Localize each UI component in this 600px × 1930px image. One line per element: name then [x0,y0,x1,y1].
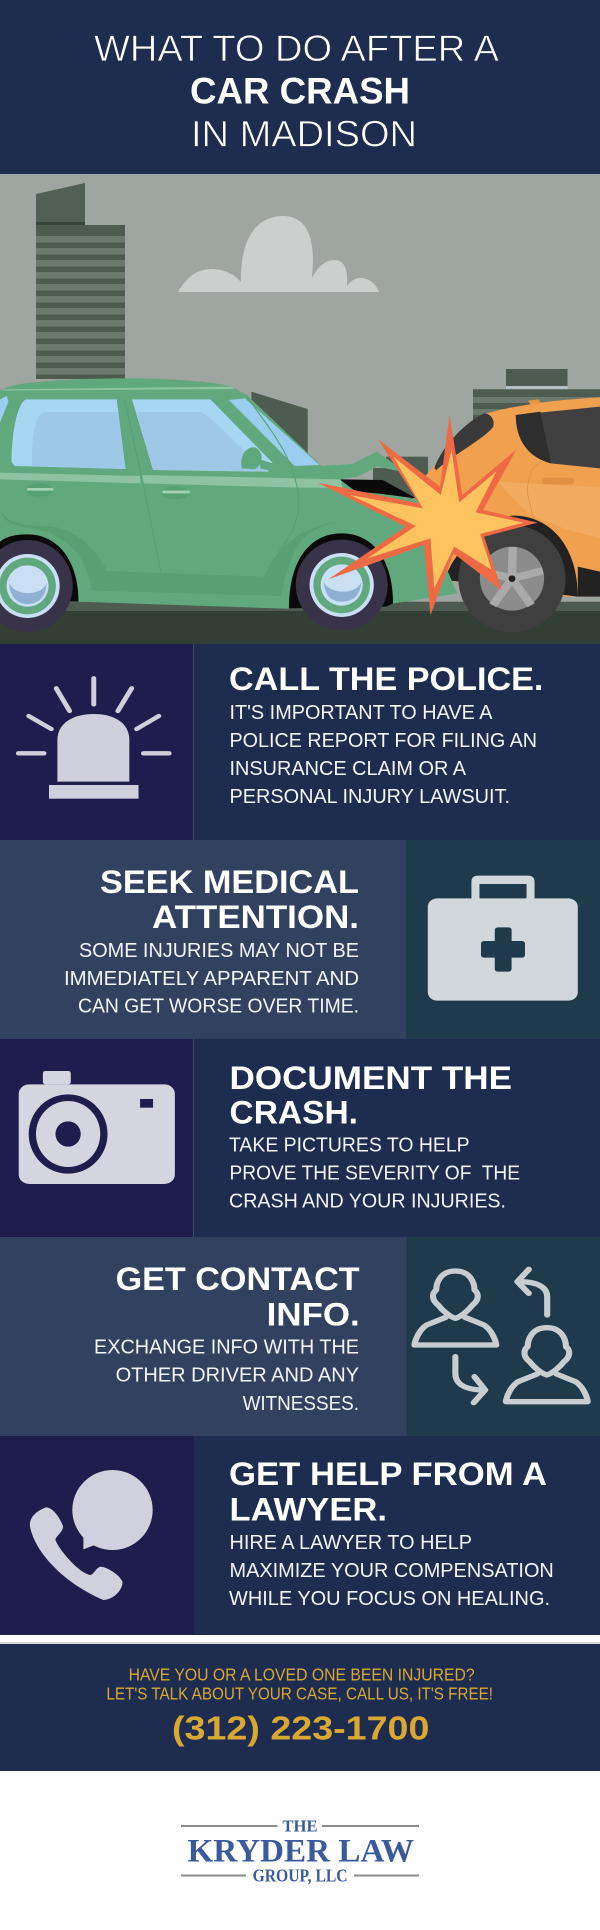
title [94,27,499,155]
logo: KRYDER LAW [188,1834,414,1870]
car windows [0,396,320,472]
callout text: LET'S TALK ABOUT YOUR CASE, CALL US, IT'S FREE! [106,1683,493,1703]
panel: get contact info [0,1237,600,1436]
road [0,602,600,644]
orange car [425,397,600,632]
text: document the crash: CRASH AND YOUR INJURIES. [229,1191,506,1213]
text: get contact info [94,1336,359,1415]
text: get contact info: WITNESSES. [243,1393,359,1415]
text: get help from a lawyer [229,1532,554,1610]
callout text: HAVE YOU OR A LOVED ONE BEEN INJURED? [129,1665,475,1685]
logo: THE [282,1817,318,1836]
text: document the crash: TAKE PICTURES TO HELP [229,1135,470,1157]
heading: seek medical attention: ATTENTION. [152,899,359,935]
text: seek medical attention: SOME INJURIES MAY NOT BE [79,940,359,962]
building: left tower [36,183,125,379]
heading: seek medical attention [100,864,359,935]
text: seek medical attention: CAN GET WORSE OVER TIME. [78,996,359,1018]
text: call the police: PERSONAL INJURY LAWSUIT. [230,786,510,808]
heading: call the police: CALL THE POLICE. [229,661,543,697]
text: get help from a lawyer: WHILE YOU FOCUS ON HEALING. [229,1588,550,1610]
panel: seek medical attention [0,840,600,1039]
buildings behind cars [251,369,600,508]
text: get contact info: OTHER DRIVER AND ANY [116,1365,359,1387]
panel: call the police [0,644,600,840]
panel: call to action [0,1644,600,1771]
title: IN MADISON [191,113,417,155]
text: seek medical attention: IMMEDIATELY APPARENT AND [64,968,359,990]
crash star [318,415,538,615]
crash illustration [0,174,600,644]
text: document the crash: PROVE THE SEVERITY OF THE [230,1163,520,1185]
callout text [106,1665,493,1703]
title: WHAT TO DO AFTER A [94,27,499,69]
panel: document the crash [0,1039,600,1237]
icon: phone and speech bubble [30,1470,153,1600]
rear wheel [0,540,73,632]
heading: document the crash [230,1060,512,1130]
phone number: (312) 223-1700 [172,1710,429,1747]
heading: get contact info [116,1261,360,1332]
header panel [0,0,600,174]
heading: document the crash: CRASH. [230,1094,358,1130]
heading: get help from a lawyer: GET HELP FROM A [229,1456,547,1492]
icon: exchange contacts [414,1269,588,1403]
front wheel [296,540,388,630]
text: get help from a lawyer: HIRE A LAWYER TO HELP [230,1532,472,1554]
heading: get contact info: INFO. [267,1296,360,1332]
text: seek medical attention [64,940,359,1018]
text: call the police: POLICE REPORT FOR FILING AN [230,730,537,752]
heading: get help from a lawyer: LAWYER. [230,1492,387,1528]
text: call the police: INSURANCE CLAIM OR A [230,758,466,780]
logo: GROUP, LLC [253,1866,348,1886]
green car [0,378,457,632]
logo [181,1817,419,1886]
heading: seek medical attention: SEEK MEDICAL [100,864,359,900]
icon: siren [18,678,169,799]
text: get help from a lawyer: MAXIMIZE YOUR COMPENSATION [230,1560,554,1582]
heading: get help from a lawyer [229,1456,547,1528]
mirror [241,447,262,469]
cloud [178,216,379,292]
icon: camera [19,1071,175,1184]
wheel arches [289,533,393,608]
heading: document the crash: DOCUMENT THE [230,1060,512,1096]
icon: medical case [428,876,578,1001]
text: call the police: IT'S IMPORTANT TO HAVE A [230,702,493,724]
text: call the police [230,702,537,808]
panel: get help from a lawyer [0,1436,600,1635]
text: document the crash [229,1135,520,1213]
heading: get contact info: GET CONTACT [116,1261,360,1297]
text: get contact info: EXCHANGE INFO WITH THE [94,1336,359,1358]
title: CAR CRASH [190,70,410,112]
